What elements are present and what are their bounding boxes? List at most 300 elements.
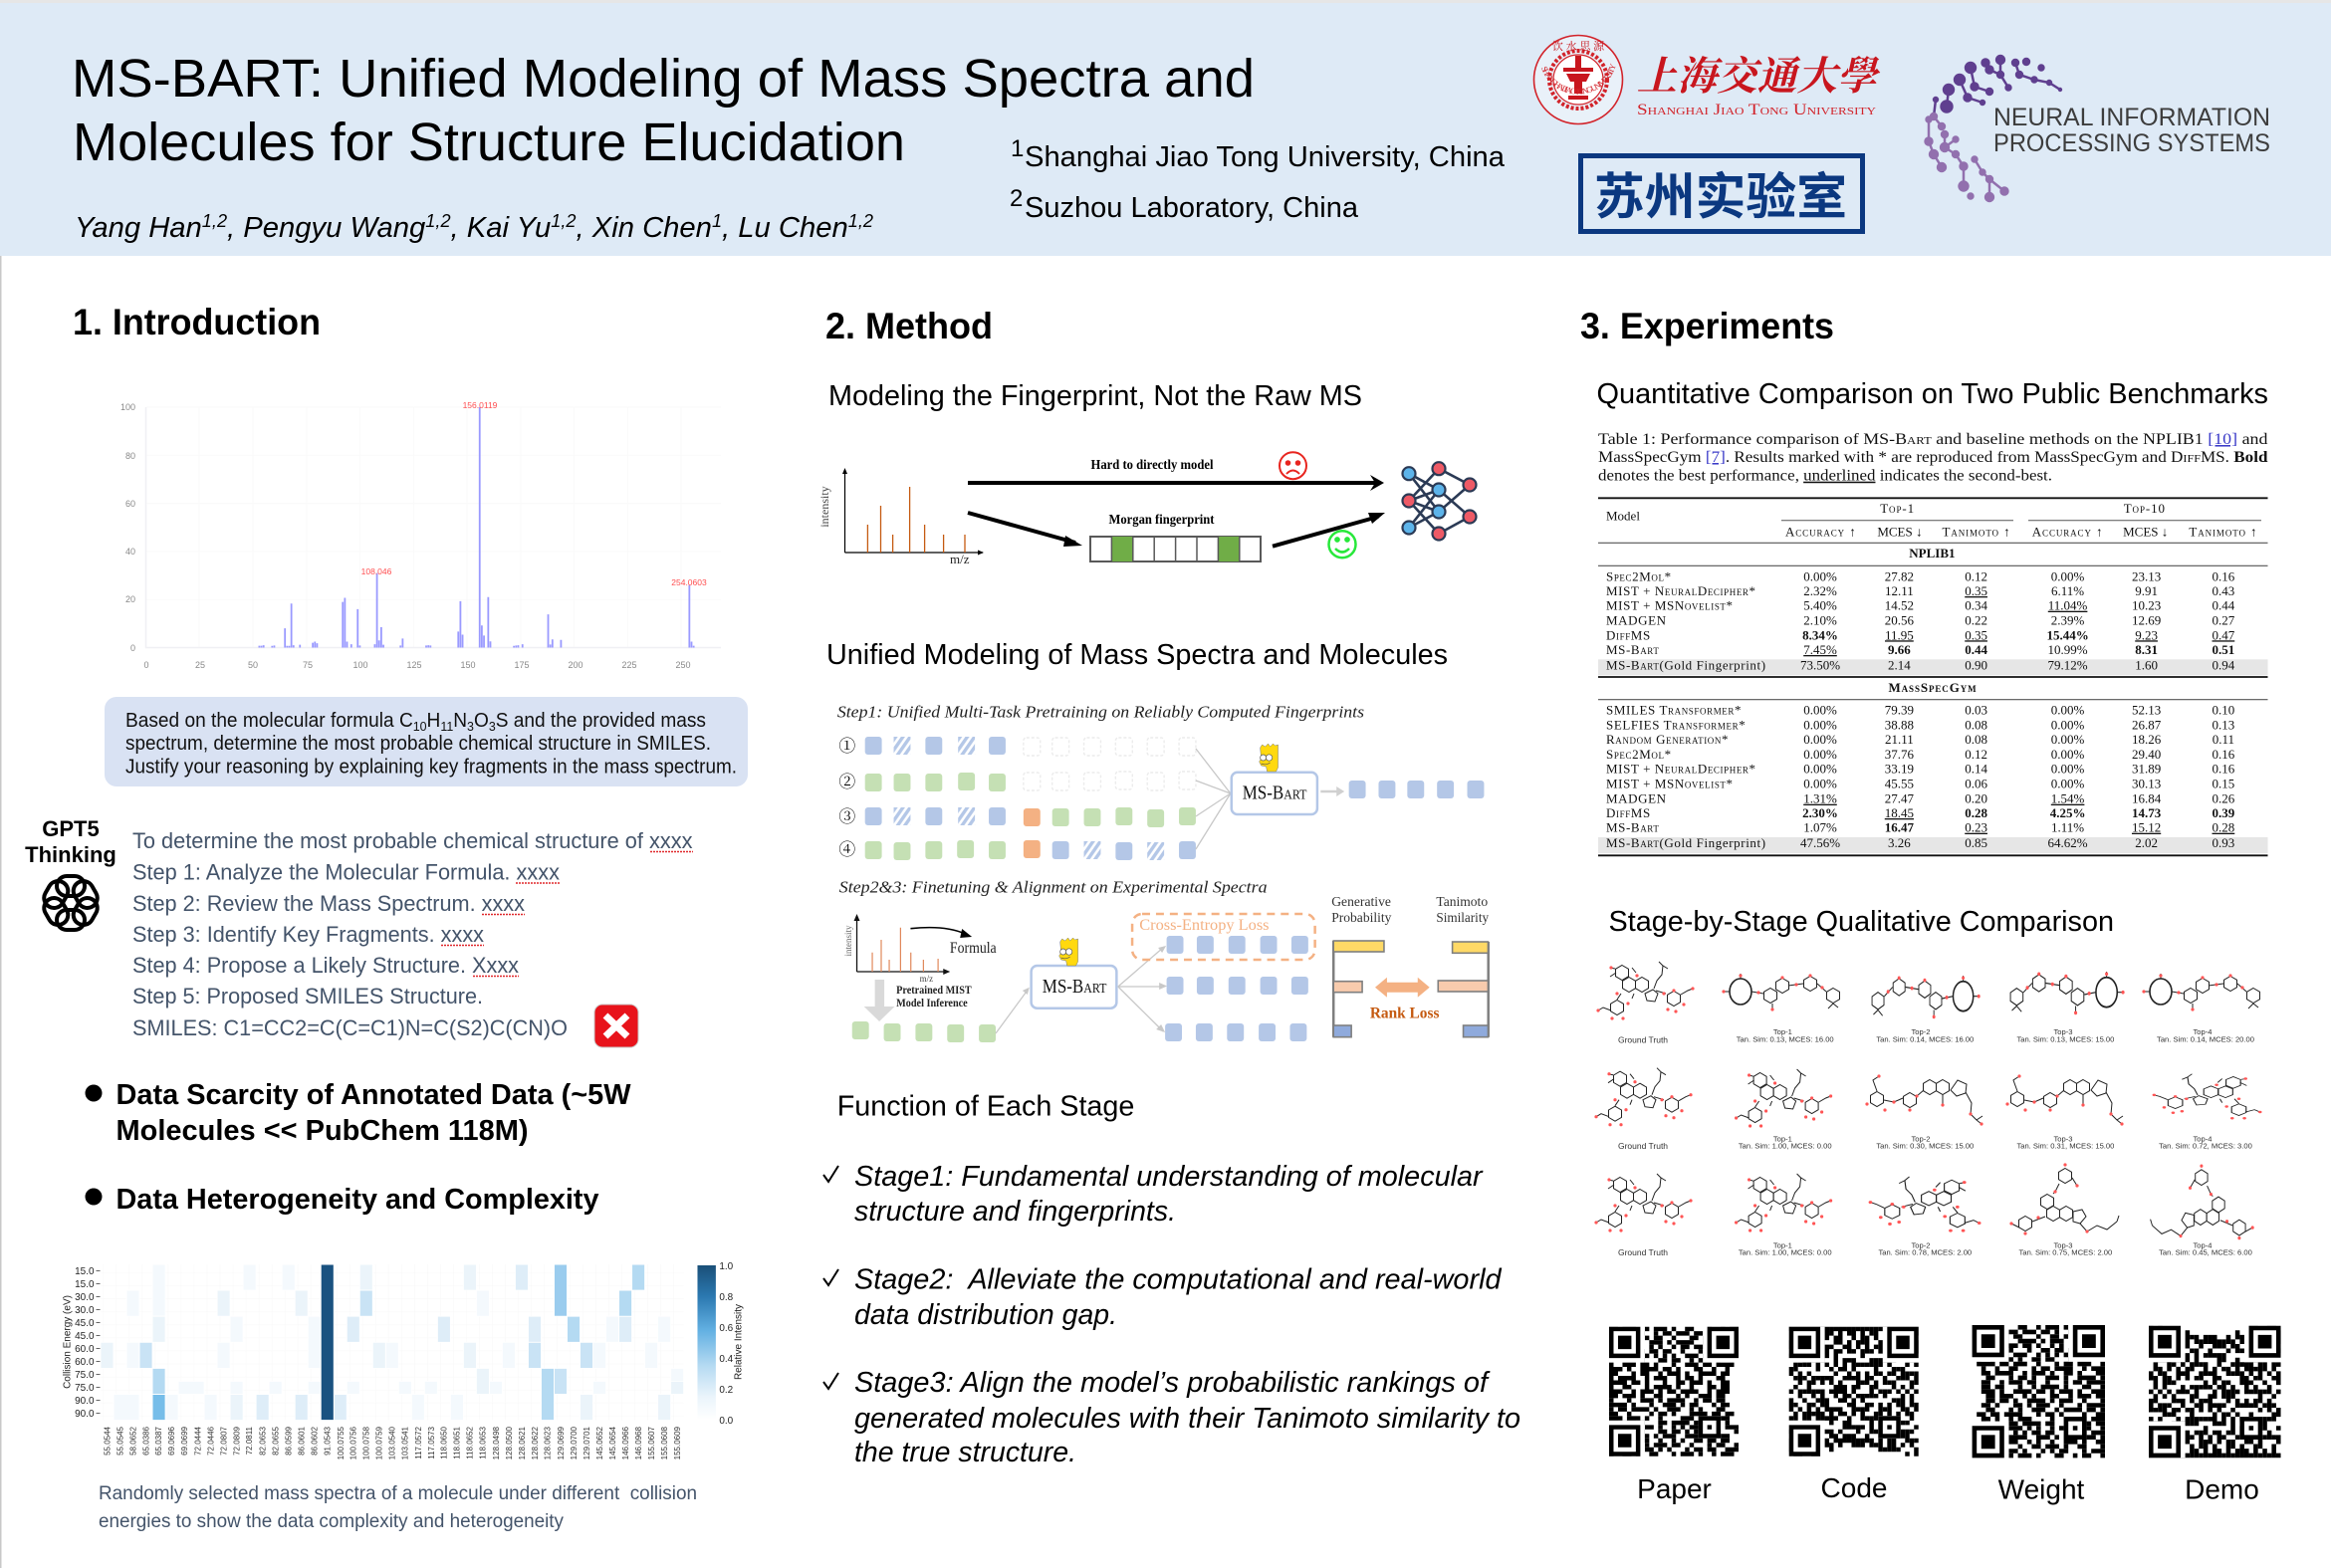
chart: collision energy heatmap: 129.0701 bbox=[583, 1426, 591, 1459]
table group: MassSpecGym: 1.54% bbox=[2051, 791, 2085, 806]
table group: NPLIB1: 14.52 bbox=[1885, 598, 1914, 613]
colorbar bbox=[697, 1261, 744, 1427]
table group: NPLIB1: 23.13 bbox=[2132, 568, 2161, 583]
table group: MassSpecGym: 38.88 bbox=[1885, 717, 1914, 732]
authors: , Xin Chen bbox=[576, 212, 712, 244]
authors: 1,2 bbox=[425, 211, 451, 231]
molecule labels: Tan. Sim: 0.13, MCES: 16.00 bbox=[1737, 1035, 1834, 1044]
table group: NPLIB1: 0.35 bbox=[1965, 627, 1987, 642]
experimental spectrum: Formula bbox=[950, 940, 997, 957]
rank loss chart: Tanimoto bbox=[1436, 894, 1488, 909]
table group: MassSpecGym: 0.00% bbox=[1803, 762, 1837, 777]
molecule labels: Tan. Sim: 0.13, MCES: 15.00 bbox=[2016, 1035, 2114, 1044]
prompt box: N bbox=[453, 710, 467, 732]
table group: MassSpecGym: MIST + MSNovelist* bbox=[1606, 777, 1734, 791]
table group: MassSpecGym: 0.10 bbox=[2213, 702, 2234, 717]
spectrum sketch bbox=[817, 468, 984, 566]
table group: MassSpecGym: 79.39 bbox=[1885, 702, 1914, 717]
chart: collision energy heatmap: 15.0 bbox=[75, 1266, 95, 1277]
QR: demo bbox=[2149, 1326, 2281, 1457]
chart: collision energy heatmap: 45.0 bbox=[75, 1331, 95, 1342]
table group: MassSpecGym: 0.26 bbox=[2213, 791, 2235, 806]
chart: collision energy heatmap: 30.0 bbox=[75, 1292, 95, 1303]
table group: MassSpecGym: 47.56% bbox=[1800, 835, 1840, 850]
table group: MassSpecGym: 0.39 bbox=[2213, 805, 2235, 820]
diagram: step 2 and 3 bbox=[839, 878, 1489, 1042]
authors: 1,2 bbox=[848, 211, 873, 231]
icon: neural network bbox=[1402, 462, 1476, 540]
table group: MassSpecGym: 0.00% bbox=[2051, 762, 2085, 777]
prompt box: Justify your reasoning by explaining key fragments in the mass spectrum. bbox=[125, 757, 737, 779]
table group: NPLIB1: 2.10% bbox=[1803, 612, 1837, 627]
chart: collision energy heatmap: 72.0444 bbox=[194, 1426, 202, 1456]
molecule labels: Top-3 bbox=[2053, 1027, 2073, 1036]
chart: mass spectrum: 254.0603 bbox=[671, 577, 707, 587]
diagram: fingerprint modeling bbox=[817, 452, 1476, 566]
label: GPT5 thinking: GPT5 bbox=[42, 816, 100, 841]
diagram: step 1 pretraining: ② bbox=[838, 773, 855, 791]
table group: MassSpecGym: 0.23 bbox=[1965, 820, 1987, 835]
table group: MassSpecGym: MIST + NeuralDecipher* bbox=[1606, 762, 1756, 777]
chart: mass spectrum: 125 bbox=[406, 660, 422, 670]
table group: MassSpecGym: MADGEN bbox=[1606, 791, 1667, 806]
logo: Suzhou Laboratory: 苏州实验室 bbox=[1594, 169, 1847, 225]
chart: mass spectrum: 75 bbox=[303, 660, 313, 670]
chart: collision energy heatmap bbox=[63, 1261, 744, 1459]
molecule labels: Ground Truth bbox=[1618, 1035, 1668, 1045]
bullet: data scarcity bbox=[86, 1079, 631, 1147]
arrow: to fingerprint bbox=[968, 513, 1082, 547]
table group: MassSpecGym: 0.13 bbox=[2213, 717, 2234, 732]
table group: MassSpecGym: 3.26 bbox=[1888, 835, 1911, 850]
subheading: fingerprint: Modeling the Fingerprint, Not the Raw MS bbox=[828, 380, 1362, 412]
prompt box: 3 bbox=[467, 719, 474, 734]
table group: NPLIB1: 0.51 bbox=[2213, 642, 2234, 657]
table group: NPLIB1: 8.31 bbox=[2135, 642, 2158, 657]
table group: MassSpecGym: 16.84 bbox=[2132, 791, 2162, 806]
experimental spectrum bbox=[843, 914, 997, 984]
table group: NPLIB1: MS-Bart bbox=[1606, 642, 1659, 657]
molecule labels: Tan. Sim: 0.75, MCES: 2.00 bbox=[2019, 1248, 2112, 1257]
table group: MassSpecGym: MS-Bart bbox=[1606, 820, 1659, 835]
table group: NPLIB1: 0.35 bbox=[1965, 583, 1987, 598]
table: results: Accuracy ↑ bbox=[2032, 524, 2103, 539]
table group: MassSpecGym: 0.00% bbox=[2051, 747, 2085, 762]
arrow: MIST inference: Model Inference bbox=[896, 998, 968, 1009]
title: Molecules for Structure Elucidation bbox=[73, 112, 905, 172]
molecule labels: Top-4 bbox=[2193, 1240, 2213, 1249]
table group: MassSpecGym: 37.76 bbox=[1885, 747, 1915, 762]
table group: NPLIB1: 0.94 bbox=[2213, 657, 2235, 672]
model response steps: Step 2: Review the Mass Spectrum. xxxx bbox=[132, 891, 525, 916]
icon: OpenAI knot bbox=[41, 876, 101, 930]
table caption: MassSpecGym [7]. Results marked with * are reproduced from MassSpecGym and DiffMS. Bold bbox=[1598, 449, 2268, 466]
table group: MassSpecGym: 4.25% bbox=[2050, 805, 2085, 820]
chart: mass spectrum: 40 bbox=[125, 547, 135, 557]
rank loss chart bbox=[1331, 894, 1489, 1037]
table caption: Table 1: Performance comparison of MS- Bart and baseline methods on the NPLIB1 [10] and bbox=[1598, 431, 2268, 448]
chart: collision energy heatmap: 91.0543 bbox=[323, 1426, 332, 1456]
molecule labels: Top-4 bbox=[2193, 1027, 2213, 1036]
chart: collision energy heatmap: 55.0544 bbox=[103, 1426, 112, 1456]
table group: MassSpecGym: 0.08 bbox=[1965, 717, 1987, 732]
icon: sad face bbox=[1280, 452, 1306, 479]
table caption bbox=[1598, 431, 2268, 485]
label: GPT5 thinking bbox=[25, 816, 117, 867]
table group: MassSpecGym: 0.08 bbox=[1965, 732, 1987, 747]
subheading: function of each stage: Function of Each Stage bbox=[837, 1091, 1134, 1123]
table group: NPLIB1: 0.12 bbox=[1965, 568, 1987, 583]
logo: NeurIPS: PROCESSING SYSTEMS bbox=[1993, 129, 2270, 157]
diagram: step 1 pretraining: ① bbox=[838, 737, 855, 756]
molecule labels: Tan. Sim: 0.30, MCES: 15.00 bbox=[1876, 1141, 1974, 1150]
chart: collision energy heatmap: 69.0699 bbox=[180, 1426, 189, 1456]
table group: NPLIB1: 9.66 bbox=[1888, 642, 1911, 657]
prompt box: 11 bbox=[440, 719, 453, 734]
heading: experiments: 3. Experiments bbox=[1580, 306, 1834, 346]
table group: NPLIB1: 0.16 bbox=[2213, 568, 2235, 583]
label: GPT5 thinking: Thinking bbox=[25, 842, 117, 867]
affiliations: 1 bbox=[1011, 135, 1024, 162]
table group: NPLIB1: MIST + MSNovelist* bbox=[1606, 598, 1734, 613]
table group: MassSpecGym: 1.11% bbox=[2051, 820, 2084, 835]
heading: introduction: 1. Introduction bbox=[73, 302, 321, 342]
table: results bbox=[1598, 498, 2268, 855]
chart: collision energy heatmap: 90.0 bbox=[75, 1409, 95, 1420]
table group: MassSpecGym: 0.00% bbox=[2051, 732, 2085, 747]
table: results: Model bbox=[1606, 509, 1640, 524]
chart: collision energy heatmap: 69.0696 bbox=[167, 1426, 176, 1456]
table group: MassSpecGym: 21.11 bbox=[1885, 732, 1914, 747]
chart: mass spectrum: 108.046 bbox=[361, 566, 392, 576]
chart: collision energy heatmap: 128.0500 bbox=[505, 1426, 514, 1459]
table group: NPLIB1: 8.34% bbox=[1802, 627, 1838, 642]
table group: MassSpecGym: 0.00% bbox=[1803, 717, 1837, 732]
chart: collision energy heatmap: 118.0653 bbox=[479, 1426, 488, 1459]
stage 3 item: generated molecules with their Tanimoto similarity to bbox=[854, 1403, 1520, 1435]
molecule labels: Top-3 bbox=[2053, 1240, 2073, 1249]
table group: MassSpecGym: 26.87 bbox=[2132, 717, 2162, 732]
colorbar: 0.0 bbox=[719, 1416, 734, 1427]
chart: collision energy heatmap: 72.0807 bbox=[219, 1426, 228, 1456]
table group: NPLIB1: 0.34 bbox=[1965, 598, 1987, 613]
chart: collision energy heatmap: 90.0 bbox=[75, 1396, 95, 1407]
rank loss chart: Similarity bbox=[1436, 910, 1489, 925]
chart: collision energy heatmap: 82.0655 bbox=[272, 1426, 281, 1456]
diagram: step 2 and 3: Step2&3: Finetuning & Alignment on Experimental Spectra bbox=[839, 878, 1268, 897]
title bbox=[72, 49, 1255, 172]
stage 2 item: data distribution gap. bbox=[854, 1299, 1117, 1331]
chart: mass spectrum: 150 bbox=[460, 660, 476, 670]
chart: mass spectrum: 100 bbox=[120, 402, 135, 412]
table group: MassSpecGym: 0.20 bbox=[1965, 791, 1987, 806]
table group: NPLIB1: MIST + NeuralDecipher* bbox=[1606, 583, 1756, 598]
icon: happy face bbox=[1328, 531, 1356, 558]
panel: method bbox=[817, 306, 1520, 1468]
table group: MassSpecGym: 0.00% bbox=[1803, 732, 1837, 747]
heatmap caption: energies to show the data complexity and heterogeneity bbox=[99, 1511, 564, 1532]
table group: MassSpecGym: 0.06 bbox=[1965, 777, 1987, 791]
table group: MassSpecGym: Random Generation* bbox=[1606, 732, 1729, 747]
table group: MassSpecGym: 0.93 bbox=[2213, 835, 2234, 850]
table group: MassSpecGym: 18.26 bbox=[2132, 732, 2162, 747]
panel: experiments bbox=[1580, 306, 2281, 1505]
table: results: Top-1 bbox=[1880, 501, 1915, 516]
model response steps: Step 4: Propose a Likely Structure. Xxxx bbox=[132, 953, 519, 978]
bullet: data heterogeneity: Data Heterogeneity and Complexity bbox=[116, 1184, 599, 1216]
chart: collision energy heatmap: 118.0650 bbox=[440, 1426, 449, 1459]
chart: collision energy heatmap: 129.0699 bbox=[557, 1426, 566, 1459]
chart: collision energy heatmap: 60.0 bbox=[75, 1357, 95, 1368]
MS-BART box: MS-Bart bbox=[1043, 976, 1107, 998]
logo: Shanghai Jiao Tong University: SHANGHAI JIAO TONG UNIVERSITY bbox=[1541, 64, 1615, 95]
table group: NPLIB1: 2.14 bbox=[1888, 657, 1911, 672]
table group: NPLIB1: 73.50% bbox=[1800, 657, 1840, 672]
table group: MassSpecGym: 1.31% bbox=[1803, 791, 1837, 806]
molecule labels: Tan. Sim: 1.00, MCES: 0.00 bbox=[1739, 1248, 1832, 1257]
chart: collision energy heatmap: 45.0 bbox=[75, 1318, 95, 1329]
table group: NPLIB1: 12.69 bbox=[2132, 612, 2161, 627]
table group: NPLIB1 bbox=[1606, 546, 2235, 672]
table group: NPLIB1: 7.45% bbox=[1803, 642, 1837, 657]
diagram: step 1 pretraining: Step1: Unified Multi-Task Pretraining on Reliably Computed Fingerprints bbox=[837, 703, 1364, 722]
table: results: MCES ↓ bbox=[2123, 524, 2168, 539]
molecule labels: Tan. Sim: 1.00, MCES: 0.00 bbox=[1739, 1141, 1832, 1150]
table group: NPLIB1: 0.27 bbox=[2213, 612, 2235, 627]
table: results: Top-10 bbox=[2124, 501, 2166, 516]
authors: 1,2 bbox=[551, 211, 576, 231]
table group: MassSpecGym: 0.85 bbox=[1965, 835, 1987, 850]
chart: collision energy heatmap: 15.0 bbox=[75, 1279, 95, 1290]
table group: MassSpecGym: 16.47 bbox=[1885, 820, 1915, 835]
model response steps: Step 5: Proposed SMILES Structure. bbox=[132, 984, 483, 1008]
morgan fingerprint bar: Morgan fingerprint bbox=[1109, 513, 1215, 528]
colorbar: 0.4 bbox=[719, 1354, 734, 1365]
table group: NPLIB1: 11.04% bbox=[2048, 598, 2088, 613]
molecule labels: Tan. Sim: 0.72, MCES: 3.00 bbox=[2159, 1141, 2252, 1150]
table group: NPLIB1: 0.44 bbox=[2213, 598, 2235, 613]
table group: NPLIB1: 9.23 bbox=[2135, 627, 2158, 642]
logo: Shanghai Jiao Tong University bbox=[1533, 34, 1881, 125]
chart: collision energy heatmap: 30.0 bbox=[75, 1305, 95, 1316]
table group: NPLIB1: 5.40% bbox=[1803, 598, 1837, 613]
table group: MassSpecGym: 31.89 bbox=[2132, 762, 2161, 777]
stage 1 item bbox=[823, 1161, 1484, 1228]
row 3 molecules bbox=[1594, 1163, 2254, 1239]
table group: MassSpecGym: 18.45 bbox=[1885, 805, 1914, 820]
table group: MassSpecGym: 0.00% bbox=[2051, 717, 2085, 732]
authors: , Kai Yu bbox=[451, 212, 551, 244]
arrow: to network bbox=[1273, 513, 1385, 547]
table group: NPLIB1: 15.44% bbox=[2046, 627, 2089, 642]
molecule labels: Tan. Sim: 0.14, MCES: 16.00 bbox=[1876, 1035, 1974, 1044]
spectrum sketch: intensity bbox=[817, 486, 831, 528]
table group: MassSpecGym: MS-Bart(Gold Fingerprint) bbox=[1606, 835, 1766, 850]
molecule labels: Tan. Sim: 0.14, MCES: 20.00 bbox=[2157, 1035, 2254, 1044]
bullet: data scarcity: Data Scarcity of Annotated Data (~5W bbox=[116, 1079, 631, 1111]
chart: collision energy heatmap: 117.0573 bbox=[427, 1426, 436, 1459]
table group: NPLIB1: MS-Bart(Gold Fingerprint) bbox=[1606, 657, 1766, 672]
table group: MassSpecGym: 1.07% bbox=[1803, 820, 1837, 835]
chart: mass spectrum: 0 bbox=[130, 643, 135, 653]
table group: NPLIB1: 2.32% bbox=[1803, 583, 1837, 598]
arrow: direct bbox=[968, 458, 1384, 491]
model response steps: Step 1: Analyze the Molecular Formula. xxxx bbox=[132, 860, 560, 884]
table group: MassSpecGym: 0.12 bbox=[1965, 747, 1987, 762]
MS-BART box bbox=[1232, 744, 1317, 814]
logo: NeurIPS bbox=[1926, 56, 2270, 201]
chart: collision energy heatmap: 155.0608 bbox=[660, 1426, 669, 1459]
QR: weight bbox=[1973, 1325, 2105, 1457]
table: results: Tanimoto ↑ bbox=[1942, 524, 2011, 539]
chart: collision energy heatmap: 75.0 bbox=[75, 1370, 95, 1381]
table group: MassSpecGym: 0.03 bbox=[1965, 702, 1987, 717]
authors: 1,2 bbox=[202, 211, 227, 231]
table group: MassSpecGym: 0.00% bbox=[1803, 777, 1837, 791]
prompt box: 10 bbox=[413, 719, 427, 734]
chart: mass spectrum: 0 bbox=[143, 660, 149, 670]
chart: mass spectrum: 156.0119 bbox=[463, 400, 498, 410]
table group: NPLIB1: 0.47 bbox=[2213, 627, 2235, 642]
chart: collision energy heatmap: 58.0652 bbox=[128, 1426, 137, 1456]
chart: mass spectrum: 20 bbox=[125, 594, 135, 604]
chart: collision energy heatmap: 118.0651 bbox=[453, 1426, 462, 1459]
chart: mass spectrum: 50 bbox=[248, 660, 258, 670]
table group: MassSpecGym: 2.02 bbox=[2135, 835, 2158, 850]
chart: mass spectrum: 60 bbox=[125, 499, 135, 509]
table group: MassSpecGym: DiffMS bbox=[1606, 805, 1651, 820]
MS-BART box bbox=[1032, 938, 1116, 1008]
table group: MassSpecGym: 0.11 bbox=[2213, 732, 2234, 747]
table group: NPLIB1: 0.22 bbox=[1965, 612, 1987, 627]
arrow: direct: Hard to directly model bbox=[1091, 458, 1214, 473]
chart: mass spectrum: 225 bbox=[621, 660, 637, 670]
QR labels: Code bbox=[1821, 1472, 1887, 1503]
bullet: data scarcity: Molecules << PubChem 118M) bbox=[116, 1115, 528, 1147]
QR: code bbox=[1789, 1327, 1919, 1456]
authors: Yang Han bbox=[75, 212, 201, 244]
molecule labels: Top-3 bbox=[2053, 1134, 2073, 1143]
table group: MassSpecGym: 0.14 bbox=[1965, 762, 1987, 777]
table group: MassSpecGym: 15.12 bbox=[2132, 820, 2161, 835]
table group: NPLIB1: 2.39% bbox=[2051, 612, 2085, 627]
cross-entropy box: Cross-Entropy Loss bbox=[1139, 917, 1270, 934]
subheading: qualitative comparison: Stage-by-Stage Qualitative Comparison bbox=[1609, 906, 2114, 938]
table group: MassSpecGym bbox=[1606, 680, 2235, 850]
table: results: MCES ↓ bbox=[1877, 524, 1922, 539]
molecule labels: Top-1 bbox=[1773, 1134, 1792, 1143]
table group: NPLIB1: 0.90 bbox=[1965, 657, 1987, 672]
heatmap caption bbox=[99, 1483, 697, 1532]
prompt box: O bbox=[474, 710, 489, 732]
prompt box bbox=[105, 697, 748, 786]
model response steps: To determine the most probable chemical structure of xxxx bbox=[132, 828, 693, 853]
heading: method: 2. Method bbox=[825, 306, 993, 346]
chart: collision energy heatmap: 100.0756 bbox=[350, 1426, 358, 1459]
table group: MassSpecGym: MassSpecGym bbox=[1888, 680, 1978, 695]
table group: NPLIB1: 9.91 bbox=[2135, 583, 2158, 598]
diagram: step 1 pretraining: ③ bbox=[838, 807, 855, 826]
table group: NPLIB1: 12.11 bbox=[1885, 583, 1914, 598]
subheading: unified modeling: Unified Modeling of Mass Spectra and Molecules bbox=[826, 639, 1448, 671]
chart: collision energy heatmap: 100.0755 bbox=[337, 1426, 346, 1459]
affiliations bbox=[1010, 135, 1506, 224]
chart: collision energy heatmap: 72.0809 bbox=[232, 1426, 241, 1456]
chart: collision energy heatmap: 103.0540 bbox=[388, 1426, 397, 1459]
chart: collision energy heatmap: 155.0609 bbox=[673, 1426, 682, 1459]
table group: MassSpecGym: 29.40 bbox=[2132, 747, 2161, 762]
table group: MassSpecGym: SMILES Transformer* bbox=[1606, 702, 1742, 717]
stage 1 item: Stage1: Fundamental understanding of molecular bbox=[854, 1161, 1484, 1193]
authors: 1 bbox=[712, 211, 722, 231]
table group: NPLIB1: 11.95 bbox=[1885, 627, 1914, 642]
chart: collision energy heatmap: 75.0 bbox=[75, 1383, 95, 1394]
prompt box: Based on the molecular formula C bbox=[125, 710, 426, 732]
authors: , Lu Chen bbox=[722, 212, 848, 244]
chart: mass spectrum: 200 bbox=[568, 660, 583, 670]
chart: collision energy heatmap: 128.0623 bbox=[544, 1426, 553, 1459]
affiliations: Suzhou Laboratory, China bbox=[1025, 192, 1359, 224]
table group: NPLIB1: 6.11% bbox=[2051, 583, 2084, 598]
molecule labels: Top-2 bbox=[1912, 1240, 1930, 1249]
chart: mass spectrum: 175 bbox=[514, 660, 530, 670]
table group: NPLIB1: 20.56 bbox=[1885, 612, 1915, 627]
colorbar: 0.2 bbox=[719, 1385, 734, 1396]
table group: MassSpecGym: 0.00% bbox=[2051, 777, 2085, 791]
prompt box: S and the provided mass bbox=[496, 710, 706, 732]
table group: NPLIB1: 10.23 bbox=[2132, 598, 2161, 613]
experimental spectrum: m/z bbox=[920, 974, 933, 984]
chart: collision energy heatmap: 86.0601 bbox=[297, 1426, 306, 1456]
morgan fingerprint bar bbox=[1090, 513, 1261, 561]
logo: Suzhou Laboratory bbox=[1581, 155, 1862, 231]
chart: collision energy heatmap: 82.0653 bbox=[259, 1426, 268, 1456]
colorbar: 1.0 bbox=[719, 1261, 734, 1272]
prompt box: spectrum, determine the most probable chemical structure in SMILES. bbox=[125, 733, 711, 755]
panel: introduction bbox=[25, 302, 748, 1532]
chart: mass spectrum: 250 bbox=[675, 660, 691, 670]
table caption: denotes the best performance, underlined indicates the second-best. bbox=[1598, 468, 2052, 485]
table group: MassSpecGym: 33.19 bbox=[1885, 762, 1914, 777]
rank loss chart: Probability bbox=[1331, 910, 1392, 925]
table group: MassSpecGym: 0.15 bbox=[2213, 777, 2234, 791]
table group: MassSpecGym: 45.55 bbox=[1885, 777, 1914, 791]
table group: NPLIB1: 1.60 bbox=[2135, 657, 2158, 672]
chart: collision energy heatmap: 103.0541 bbox=[400, 1426, 409, 1459]
chart: collision energy heatmap: 55.0545 bbox=[116, 1426, 124, 1456]
chart: collision energy heatmap: 145.0654 bbox=[608, 1426, 617, 1459]
chart: collision energy heatmap: 100.0758 bbox=[362, 1426, 371, 1459]
chart: collision energy heatmap: 86.0599 bbox=[285, 1426, 294, 1456]
table group: MassSpecGym: 0.16 bbox=[2213, 747, 2235, 762]
table group: MassSpecGym: SELFIES Transformer* bbox=[1606, 717, 1746, 732]
molecule labels bbox=[1618, 1027, 2254, 1257]
table group: NPLIB1: 0.43 bbox=[2213, 583, 2234, 598]
table group: MassSpecGym: 27.47 bbox=[1885, 791, 1915, 806]
model response steps: SMILES: C1=CC2=C(C=C1)N=C(S2)C(CN)O bbox=[132, 1015, 568, 1040]
table group: NPLIB1: 0.44 bbox=[1965, 642, 1987, 657]
row 1 molecules bbox=[1596, 962, 2260, 1020]
chart: mass spectrum bbox=[120, 400, 721, 670]
affiliations: Shanghai Jiao Tong University, China bbox=[1025, 141, 1506, 173]
table group: NPLIB1: 79.12% bbox=[2048, 657, 2088, 672]
prompt box: H bbox=[427, 710, 440, 732]
QR labels bbox=[1637, 1472, 2259, 1505]
QR labels: Paper bbox=[1637, 1473, 1712, 1504]
molecule comparison grid bbox=[1594, 962, 2262, 1257]
chart: collision energy heatmap: 146.0968 bbox=[634, 1426, 643, 1459]
table group: NPLIB1: 10.99% bbox=[2048, 642, 2088, 657]
